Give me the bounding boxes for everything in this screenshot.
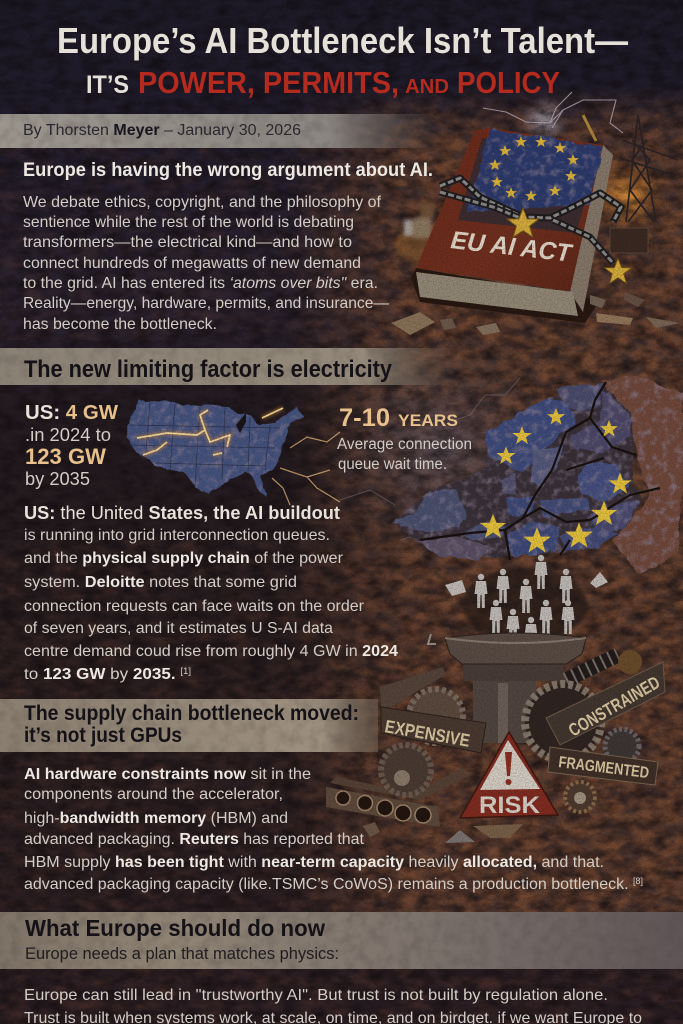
icon: chains across book — [440, 178, 621, 263]
title line 2: POWER, PERMITS, — [138, 65, 399, 100]
intro paragraph: We debate ethics, copyright, and the philosophy of — [23, 194, 382, 211]
icon: debris under machine — [363, 822, 523, 843]
title line 2: AND — [405, 76, 449, 98]
icon: FRAGMENTED sign — [548, 747, 658, 785]
heading: limiting factor: The new limiting factor is electricity — [24, 356, 393, 383]
text block: US buildout: of seven years, and it estimates U S-AI data — [24, 620, 333, 637]
title line 2: POLICY — [457, 65, 560, 100]
icon: glow beneath fault lines — [137, 408, 283, 455]
illustration: chained EU AI Act book — [391, 92, 680, 335]
subheading: Europe is having the wrong argument about AI. — [23, 160, 433, 181]
text block: hardware constraints: HBM supply has been tight with near-term capacity heavily allocated, and that. — [24, 854, 604, 871]
band: electricity heading — [0, 348, 455, 385]
stat: connection queue: queue wait time. — [338, 456, 447, 473]
stat: US demand — [25, 402, 118, 489]
text block: hardware constraints: advanced packaging. Reuters has reported that — [24, 831, 365, 848]
illustration: United States map with grid cracks — [127, 378, 520, 540]
icon: book cover — [416, 128, 603, 291]
stat: connection queue: 7-10 — [339, 404, 390, 432]
icon: gold stars of Europe — [480, 408, 631, 552]
icon: dark gap behind crowd — [463, 567, 587, 643]
heading: supply chain — [24, 702, 359, 747]
text block: US buildout: to 123 GW by 2035. — [24, 666, 173, 683]
label: EU AI ACT: EU AI ACT — [449, 226, 575, 268]
text block: US buildout: centre demand coud rise from roughly 4 GW in 2024 — [24, 643, 398, 660]
heading: supply chain: The supply chain bottleneck moved: — [24, 702, 359, 725]
heading: what Europe should do: Europe needs a plan that matches physics: — [25, 944, 339, 963]
stat: connection queue: Average connection — [337, 436, 472, 453]
icon: crowd of workers — [445, 555, 608, 651]
icon: RISK warning triangle — [460, 732, 558, 819]
icon: dark cover frame — [458, 138, 600, 233]
text block: hardware constraints: [8] — [633, 876, 643, 886]
text block: hardware constraints: components around the accelerator, — [24, 786, 283, 803]
text block: hardware constraints: high-bandwidth memory (HBM) and — [24, 810, 288, 827]
text block: US buildout: US: the United States, the AI buildout — [24, 503, 340, 523]
icon: blue cover panel — [466, 130, 603, 212]
icon: stick behind book — [583, 115, 596, 141]
text block: trustworthy AI — [24, 987, 642, 1024]
icon: crate right of book — [610, 228, 648, 253]
icon: book bottom pages — [416, 272, 578, 316]
icon: book base shadow — [411, 268, 600, 323]
icon: plate holes — [336, 791, 431, 823]
text block: US buildout: connection requests can face waits on the order — [24, 598, 365, 615]
intro paragraph: transformers—the electrical kind—and how to — [23, 234, 352, 251]
icon: gears — [381, 684, 639, 812]
icon: RISK warning triangle: RISK — [479, 792, 541, 819]
icon: twelve gold stars — [489, 136, 579, 201]
icon: large gold star locks — [507, 208, 632, 284]
icon: drive shaft — [566, 650, 642, 680]
title line 2 — [86, 65, 560, 100]
title line 2: IT’S — [86, 71, 129, 99]
text block: US buildout: is running into grid interconnection queues. — [24, 527, 330, 544]
heading: supply chain: it’s not just GPUs — [24, 724, 182, 747]
icon: funnel bowl — [428, 633, 586, 664]
text block: trustworthy AI: Europe can still lead in "trustworthy AI". But trust is not built by regulation alone. — [24, 987, 608, 1004]
icon: machine base plate — [326, 767, 466, 827]
intro paragraph: connect hundreds of megawatts of new demand — [23, 255, 361, 272]
icon: blue land fragments — [393, 383, 640, 560]
icon: ruined building left of book — [395, 203, 455, 265]
icon: book right page edge — [570, 145, 613, 312]
band: supply chain heading — [0, 699, 378, 752]
icon: rust-coloured eastern land — [600, 378, 683, 575]
band: what Europe should do — [0, 912, 683, 969]
icon: state border lines — [130, 402, 280, 486]
illustration: crowd funnel machine with signs — [326, 555, 665, 843]
icon: lightning above book — [483, 92, 623, 133]
intro paragraph: to the grid. AI has entered its ‘atoms over bits" era. — [23, 275, 378, 292]
icon: left machine frame — [380, 667, 445, 707]
text block: US buildout: system. Deloitte notes that some grid — [24, 574, 297, 591]
stat: connection queue: YEARS — [398, 411, 458, 430]
text block: hardware constraints: AI hardware constraints now sit in the — [24, 766, 311, 783]
intro paragraph: Reality—energy, hardware, permits, and insurance— — [23, 295, 389, 312]
title line 1: Europe’s AI Bottleneck Isn’t Talent— — [57, 20, 628, 61]
byline: By Thorsten Meyer – January 30, 2026 — [23, 122, 301, 139]
band: byline — [0, 114, 440, 148]
intro paragraph: sentience while the rest of the world is debating — [23, 214, 354, 231]
text block: hardware constraints — [24, 766, 643, 893]
text block: hardware constraints: advanced packaging capacity (like.TSMC’s CoWoS) remains a production bottleneck. — [24, 876, 629, 893]
icon: electricity pylon — [620, 115, 678, 222]
intro paragraph — [23, 194, 389, 333]
heading: what Europe should do — [25, 915, 339, 963]
stat: connection queue — [337, 404, 472, 473]
icon: glowing fault lines — [137, 408, 283, 455]
text block: US buildout: [1] — [180, 666, 191, 676]
stat: US demand: 123 GW — [25, 444, 106, 469]
icon: CONSTRAINED sign — [546, 662, 665, 745]
icon: US outline — [127, 400, 303, 497]
text block: US buildout — [24, 503, 398, 683]
icon: lightning from US to Europe — [272, 432, 340, 505]
stat: US demand: by 2035 — [25, 469, 90, 489]
icon: rubble tiles — [391, 292, 680, 335]
stat: US demand: US: 4 GW — [25, 402, 118, 424]
illustration: cracked map of Europe — [393, 378, 683, 575]
icon: land mass beneath fragments — [393, 383, 642, 557]
icon: EXPENSIVE sign: EXPENSIVE — [383, 716, 471, 751]
intro paragraph: has become the bottleneck. — [23, 316, 217, 333]
icon: Great Lakes gap — [236, 413, 246, 433]
stat: US demand: .in 2024 to — [25, 425, 111, 445]
text block: US buildout: and the physical supply chain of the power — [24, 550, 344, 567]
icon: faint storm lines — [340, 378, 520, 540]
icon: FRAGMENTED sign: FRAGMENTED — [558, 754, 650, 782]
icon: dark cracks — [420, 382, 660, 560]
title — [57, 20, 628, 100]
heading: what Europe should do: What Europe should do now — [25, 915, 325, 941]
text block: intro — [23, 160, 433, 333]
icon: funnel stem — [463, 663, 563, 743]
